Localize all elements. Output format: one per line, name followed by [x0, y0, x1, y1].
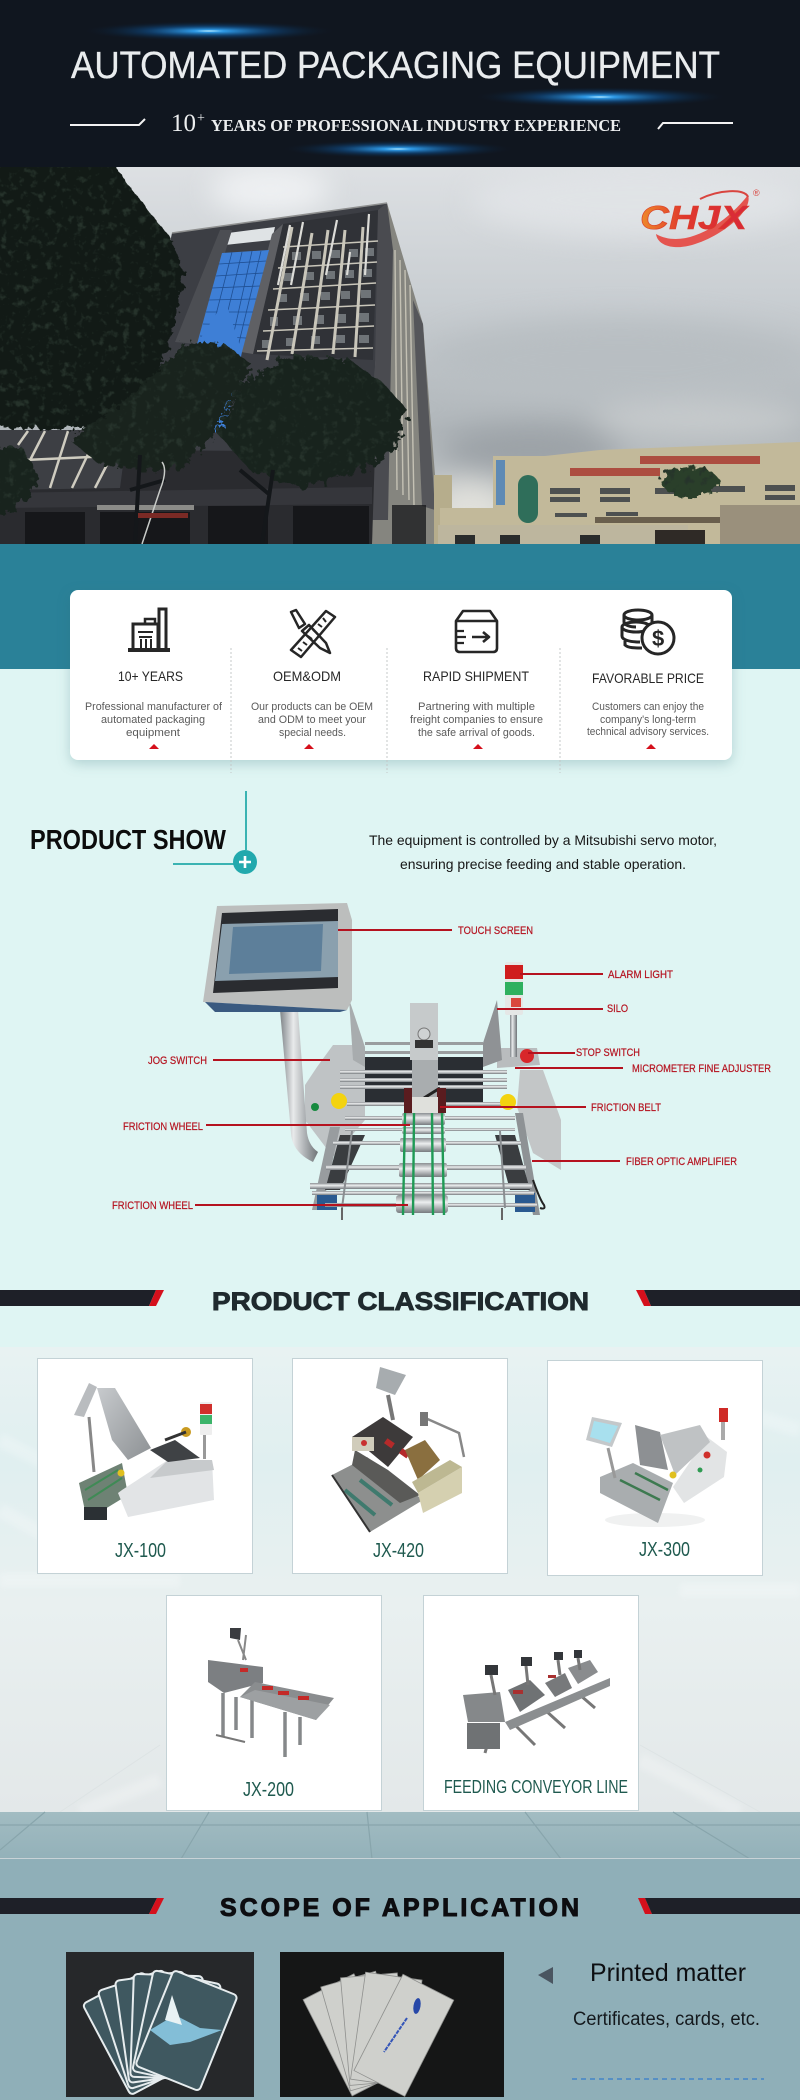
feet pins: [342, 1208, 502, 1220]
tower front face: [100, 203, 387, 544]
teal band: [0, 544, 800, 669]
heading bar: product classification: PRODUCT CLASSIFICATION: [212, 1288, 589, 1316]
model name: JX-200: [243, 1779, 294, 1801]
description: the safe arrival of goods.: [418, 727, 535, 739]
machine: [74, 1383, 214, 1520]
intro text: The equipment is controlled by a Mitsubishi servo motor,: [369, 832, 717, 848]
description: special needs.: [279, 727, 346, 739]
feature: 10+ years: [85, 609, 223, 749]
callout: stop switch: [528, 1047, 640, 1059]
background streaks: [0, 1400, 800, 1812]
green belts: [403, 1113, 444, 1215]
description: [251, 701, 373, 739]
product card: JX-200: [166, 1596, 382, 1810]
callout: alarm light: ALARM LIGHT: [608, 969, 673, 981]
palm tree: [662, 466, 718, 498]
heading: 10+ YEARS: [118, 668, 183, 684]
callout: friction wheel upper: FRICTION WHEEL: [123, 1121, 203, 1133]
left accent line: [70, 119, 145, 125]
heading: product show: [30, 791, 257, 874]
product card: feeding conveyor line: [424, 1596, 638, 1810]
tree trunks: [130, 455, 275, 516]
logo CHJX: [640, 188, 760, 247]
alarm light tower: [505, 962, 523, 1057]
heading: OEM&ODM: [273, 668, 341, 684]
intro text: ensuring precise feeding and stable operation.: [400, 856, 686, 872]
panel: classification background: [0, 1347, 800, 1812]
icon: coins: [622, 610, 674, 654]
rollers: [396, 1113, 448, 1213]
description: and ODM to meet your: [258, 714, 366, 726]
callout: touch screen: TOUCH SCREEN: [458, 925, 533, 937]
rear rods: [365, 1042, 483, 1045]
logo CHJX: ®: [753, 188, 760, 198]
right housing: [517, 1070, 561, 1170]
dark interior: [365, 1057, 483, 1103]
subtitle: [171, 110, 621, 137]
panel: application background: [0, 1859, 800, 2100]
right low buildings: [434, 442, 800, 544]
roof cornice: [172, 203, 387, 233]
centre tower: [410, 1003, 438, 1060]
callout: friction belt: FRICTION BELT: [591, 1102, 661, 1114]
callout: jog switch: JOG SWITCH: [148, 1055, 207, 1067]
light glow: bottom: [283, 140, 513, 158]
feature: OEM ODM: [251, 610, 373, 749]
heading bar: scope of application: SCOPE OF APPLICATION: [220, 1894, 579, 1922]
machine: [203, 903, 561, 1220]
marker: [646, 744, 656, 749]
description: equipment: [126, 727, 180, 739]
heading bar: scope of application: [0, 1894, 800, 1922]
tree 2: [70, 340, 252, 470]
photo: printed cards: [66, 1952, 254, 2097]
machine: [463, 1650, 610, 1753]
lower rods: [310, 1116, 537, 1207]
subtitle: YEARS OF PROFESSIONAL INDUSTRY EXPERIENCE: [211, 116, 621, 135]
podium: [0, 450, 375, 544]
red signage glow: [138, 513, 188, 518]
labelled machine diagram: [112, 903, 771, 1220]
light glow: middle: [475, 87, 725, 107]
application text: [573, 1959, 760, 2030]
touch screen housing: [203, 903, 352, 1010]
tower side face: [370, 203, 437, 544]
tree 3: [0, 357, 407, 515]
marker: [304, 744, 314, 749]
description: Our products can be OEM: [251, 701, 373, 713]
product card: JX-300: [548, 1360, 762, 1576]
photo: printed envelopes: [280, 1952, 504, 2097]
model name: FEEDING CONVEYOR LINE: [444, 1777, 628, 1797]
silo plates: [349, 999, 365, 1067]
product card: JX-420: [292, 1358, 508, 1574]
lower frame: [312, 1127, 340, 1210]
blue glass curtain wall: [197, 250, 269, 352]
description: [587, 701, 709, 738]
application text: Printed matter: [590, 1959, 746, 1987]
callout: fiber optic amplifier: FIBER OPTIC AMPLIFIER: [626, 1156, 737, 1168]
description: automated packaging: [101, 714, 205, 726]
green button: [311, 1103, 319, 1111]
callout: silo: SILO: [607, 1003, 628, 1015]
yellow knobs: [331, 1093, 347, 1109]
icon: factory: [128, 609, 170, 650]
title: AUTOMATED PACKAGING EQUIPMENT: [71, 45, 720, 87]
heading: FAVORABLE PRICE: [592, 670, 704, 686]
heading: RAPID SHIPMENT: [423, 668, 529, 684]
screen bezel: [213, 909, 338, 993]
intro text: [369, 832, 717, 872]
heading bar: product classification: [0, 1288, 800, 1316]
model name: JX-420: [373, 1540, 424, 1562]
header banner: [0, 0, 800, 167]
plus badge: [233, 850, 257, 874]
cable: [533, 1180, 544, 1209]
marker: [149, 744, 159, 749]
icon: parcel with arrow: [456, 611, 497, 652]
support pole: [280, 1010, 318, 1162]
left housing: [305, 1045, 365, 1157]
red stop button: [520, 1049, 534, 1063]
piers beside glass: [175, 230, 232, 344]
callout: silo: [497, 1003, 628, 1015]
feature: favorable price: [587, 610, 709, 749]
subtitle: 10: [171, 110, 196, 137]
dashed rule: [572, 2078, 764, 2080]
rooftop pipes: [278, 214, 369, 285]
application text: Certificates, cards, etc.: [573, 2009, 760, 2030]
callout: stop switch: STOP SWITCH: [576, 1047, 640, 1059]
icon: pencil and ruler: [291, 610, 335, 657]
icon: left pointer: [538, 1967, 553, 1984]
grid windows: [253, 210, 378, 360]
subtitle: +: [197, 111, 205, 126]
screen: [229, 924, 323, 974]
right accent line: [658, 123, 733, 129]
roof opening: [225, 227, 275, 245]
logo CHJX: CHJX: [640, 199, 749, 236]
description: Partnering with multiple: [418, 701, 535, 713]
dollar sign: $: [652, 626, 664, 651]
heading: product show: PRODUCT SHOW: [30, 824, 226, 855]
company building photo: [0, 150, 800, 544]
machine: [586, 1408, 728, 1527]
callout: micrometer fine adjuster: MICROMETER FINE ADJUSTER: [632, 1063, 771, 1075]
description: company's long-term: [600, 714, 696, 726]
machine: [208, 1628, 334, 1757]
upper rods: [340, 1070, 507, 1106]
model name: JX-100: [115, 1540, 166, 1562]
panel: floor tiles: [0, 1812, 800, 1860]
light glow: top: [84, 21, 334, 41]
machine: [332, 1367, 464, 1532]
bracket lines: [173, 791, 246, 864]
product card: JX-100: [38, 1358, 252, 1574]
description: Professional manufacturer of: [85, 701, 223, 713]
marker: [473, 744, 483, 749]
column dividers: [231, 648, 560, 773]
model name: JX-300: [639, 1539, 690, 1561]
feature: rapid shipment: [410, 611, 543, 749]
clouds: [210, 165, 800, 540]
back trees: [0, 150, 184, 430]
description: freight companies to ensure: [410, 714, 543, 726]
description: [85, 701, 223, 739]
description: technical advisory services.: [587, 726, 709, 738]
description: Customers can enjoy the: [592, 701, 704, 713]
features card: [70, 590, 732, 773]
description: [410, 701, 543, 739]
callout: friction wheel lower: FRICTION WHEEL: [112, 1200, 193, 1212]
lower left grid: [0, 430, 120, 490]
